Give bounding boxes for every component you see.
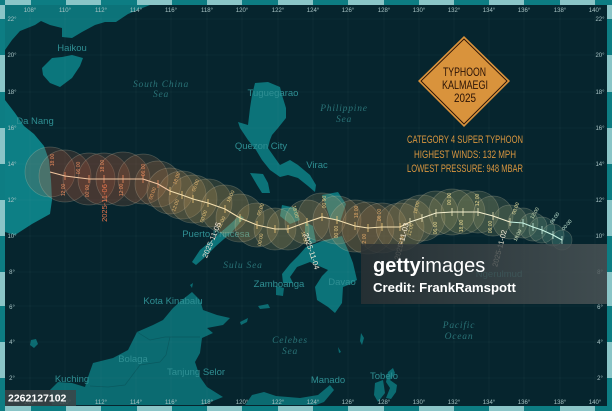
latitude labels left	[7, 17, 17, 382]
longitude labels top: 120°	[236, 8, 249, 14]
longitude labels bottom: 132°	[448, 400, 461, 406]
small time labels along track: 00:00	[511, 202, 521, 216]
longitude labels bottom: 130°	[413, 400, 426, 406]
small time labels along track: 00:00	[447, 193, 453, 205]
small time labels along track: 18:00	[290, 205, 300, 219]
latitude labels left: 10°	[7, 234, 17, 240]
sea labels	[133, 80, 475, 357]
longitude labels bottom	[24, 400, 602, 406]
small time labels along track: 18:00	[513, 228, 524, 243]
small time labels along track: 00:00	[257, 233, 265, 247]
longitude labels bottom: 128°	[378, 400, 391, 406]
small time labels along track: 12:00	[119, 184, 125, 196]
small time labels along track: 00:00	[85, 185, 91, 197]
small time labels along track: 06:00	[191, 179, 201, 193]
city labels: Davao	[328, 277, 356, 288]
latitude labels left: 6°	[9, 305, 15, 311]
longitude labels bottom: 140°	[589, 400, 602, 406]
city labels: Manado	[311, 375, 345, 386]
latitude labels right: 12°	[595, 198, 605, 204]
longitude labels bottom: 122°	[272, 400, 285, 406]
longitude labels bottom: 116°	[165, 400, 178, 406]
small time labels along track: 06:00	[320, 196, 326, 208]
longitude labels top: 118°	[201, 8, 214, 14]
land: Mindanao	[282, 236, 357, 313]
land: Halmahera	[374, 368, 397, 402]
longitude labels top: 108°	[24, 8, 37, 14]
land: small islands	[30, 283, 364, 353]
longitude labels top: 132°	[448, 8, 461, 14]
city labels: Kuching	[55, 374, 89, 385]
city labels: Haikou	[57, 43, 87, 54]
image id tag	[5, 390, 76, 406]
watermark banner	[361, 244, 607, 304]
small time labels along track: 00:00	[398, 234, 406, 248]
small time labels along track: 00:00	[199, 210, 209, 224]
latitude labels left: 20°	[7, 53, 17, 59]
storm statistics text: LOWEST PRESSURE: 948 MBAR	[407, 163, 523, 175]
latitude labels left: 18°	[7, 90, 17, 96]
longitude labels bottom: 138°	[554, 400, 567, 406]
longitude labels bottom: 108°	[24, 400, 37, 406]
longitude labels top: 138°	[554, 8, 567, 14]
longitude labels top: 124°	[307, 8, 320, 14]
date labels along track: 2025-11-03	[392, 222, 411, 261]
sea labels: Sea	[282, 347, 298, 357]
longitude labels bottom: 136°	[518, 400, 531, 406]
longitude labels top: 140°	[589, 8, 602, 14]
small time labels along track: 12:00	[475, 194, 481, 206]
latitude labels left: 14°	[7, 162, 17, 168]
longitude labels bottom: 124°	[307, 400, 320, 406]
image id tag: 2262127102	[8, 392, 67, 404]
sea labels: Sea	[336, 115, 352, 125]
latitude labels right: 18°	[595, 90, 605, 96]
longitude labels top: 128°	[378, 8, 391, 14]
sea labels: Philippine	[319, 104, 368, 114]
small time labels along track: 12:00	[171, 199, 181, 213]
sea labels: Pacific	[442, 320, 475, 331]
date labels along track: 2025-11-06	[100, 184, 109, 222]
city labels: Zamboanga	[254, 279, 305, 290]
latitude labels right: 10°	[595, 234, 605, 240]
latitude labels left: 22°	[7, 17, 17, 23]
small time labels along track: 18:00	[226, 189, 237, 204]
city labels: Tuguegarao	[248, 88, 298, 99]
longitude labels top: 110°	[59, 8, 72, 14]
longitude labels bottom: 120°	[236, 400, 249, 406]
small time labels along track: 00:00	[332, 226, 338, 238]
longitude labels bottom: 112°	[95, 400, 108, 406]
city labels: Tobelo	[370, 371, 398, 382]
longitude labels bottom: 126°	[342, 400, 355, 406]
typhoon wind radius circles	[25, 147, 572, 254]
date labels along track: 2025-11-02	[490, 229, 509, 268]
latitude labels right	[595, 17, 605, 382]
city labels	[16, 43, 522, 386]
longitude labels top: 134°	[483, 8, 496, 14]
small time labels along track: 00:00	[561, 218, 574, 232]
land: Hainan	[42, 55, 83, 87]
sea labels: South China	[133, 80, 189, 90]
latitude labels left: 8°	[9, 270, 15, 276]
date labels along track: 2025-11-04	[301, 232, 321, 271]
date labels along track: 2025-11-05	[200, 221, 223, 259]
longitude labels bottom: 114°	[130, 400, 143, 406]
sea labels: Ocean	[445, 332, 473, 342]
storm statistics text	[407, 134, 523, 175]
land: Visayas	[280, 192, 346, 244]
small time labels along track: 12:00	[299, 231, 309, 245]
small time labels along track: 18:00	[172, 172, 182, 186]
title sign: orange diamond	[418, 36, 510, 127]
city labels: Virac	[306, 160, 328, 171]
small time labels along track: 18:00	[413, 201, 422, 215]
sea labels: Sea	[153, 90, 169, 100]
land: interior borders	[90, 332, 200, 387]
small time labels along track: 06:00	[488, 221, 494, 233]
latitude labels left: 16°	[7, 126, 17, 132]
title sign: orange diamond: KALMAEGI	[442, 78, 488, 92]
typhoon track line	[50, 172, 562, 240]
land: Vietnam	[5, 100, 52, 235]
date labels along track	[100, 184, 509, 271]
small time labels along track: 18:00	[100, 160, 106, 172]
land: Sulawesi	[245, 385, 334, 405]
city labels: Puerto Princesa	[182, 229, 251, 240]
small time labels along track: 12:00	[529, 206, 541, 220]
longitude labels top: 116°	[165, 8, 178, 14]
small time labels along track: 12:00	[217, 215, 228, 230]
watermark banner: gettyimages	[373, 255, 485, 277]
longitude labels bottom: 110°	[59, 400, 72, 406]
longitude labels bottom: 134°	[483, 400, 496, 406]
longitude labels top: 112°	[95, 8, 108, 14]
sea labels: Celebes	[272, 336, 308, 346]
land: Palawan	[192, 215, 244, 265]
longitude labels top: 136°	[518, 8, 531, 14]
land: Borneo	[50, 292, 230, 405]
title sign: orange diamond: TYPHOON	[443, 65, 486, 79]
longitude labels top: 130°	[413, 8, 426, 14]
longitude labels top: 114°	[130, 8, 143, 14]
title sign: orange diamond: 2025	[454, 91, 476, 105]
latitude labels right: 16°	[595, 126, 605, 132]
land: southern China	[5, 5, 150, 50]
latitude labels right: 4°	[597, 340, 603, 346]
latitude labels right: 20°	[595, 53, 605, 59]
latitude labels left: 12°	[7, 198, 17, 204]
city labels: Quezon City	[235, 141, 287, 152]
small time labels along track: 06:00	[256, 203, 266, 217]
small time labels along track: 12:00	[362, 234, 368, 246]
track tick marks	[65, 172, 562, 244]
small time labels along track: 12:00	[61, 184, 67, 196]
small time labels along track: 18:00	[459, 220, 465, 232]
small time labels along track: 06:00	[141, 164, 147, 176]
latitude labels left: 4°	[9, 340, 15, 346]
small time labels along track: 12:00	[407, 223, 416, 237]
storm statistics text: HIGHEST WINDS: 132 MPH	[414, 149, 516, 161]
small time labels along track: 06:00	[549, 211, 561, 225]
small time labels along track: 18:00	[50, 154, 56, 166]
small time labels along track	[50, 154, 574, 248]
city labels: Bolaga	[118, 354, 149, 365]
land: Luzon	[238, 82, 316, 192]
storm statistics text: CATEGORY 4 SUPER TYPHOON	[407, 134, 523, 146]
latitude labels right: 14°	[595, 162, 605, 168]
latitude labels right: 6°	[597, 305, 603, 311]
sea labels: Sulu Sea	[223, 261, 263, 271]
small time labels along track: 06:00	[377, 209, 383, 221]
map land masses	[5, 5, 397, 405]
land: Mindoro	[250, 173, 270, 193]
longitude labels top: 122°	[272, 8, 285, 14]
longitude labels top	[24, 8, 602, 14]
city labels: Kota Kinabalu	[143, 296, 203, 307]
small time labels along track: 06:00	[433, 222, 439, 234]
longitude labels bottom: 118°	[201, 400, 214, 406]
watermark banner: Credit: FrankRamspott	[373, 280, 516, 295]
small time labels along track: 18:00	[354, 206, 360, 218]
small time labels along track: 06:00	[76, 162, 82, 174]
latitude labels left: 2°	[9, 376, 15, 382]
latitude labels right: 22°	[595, 17, 605, 23]
city labels: Tanjung Selor	[167, 367, 225, 378]
latitude labels right: 2°	[597, 376, 603, 382]
latitude labels right: 8°	[597, 270, 603, 276]
small time labels along track: 00:00	[148, 187, 158, 201]
city labels: Da Nang	[16, 116, 54, 127]
land: Sulu islands	[240, 286, 284, 325]
city labels: Ngerulmud	[476, 269, 522, 280]
longitude labels top: 126°	[342, 8, 355, 14]
